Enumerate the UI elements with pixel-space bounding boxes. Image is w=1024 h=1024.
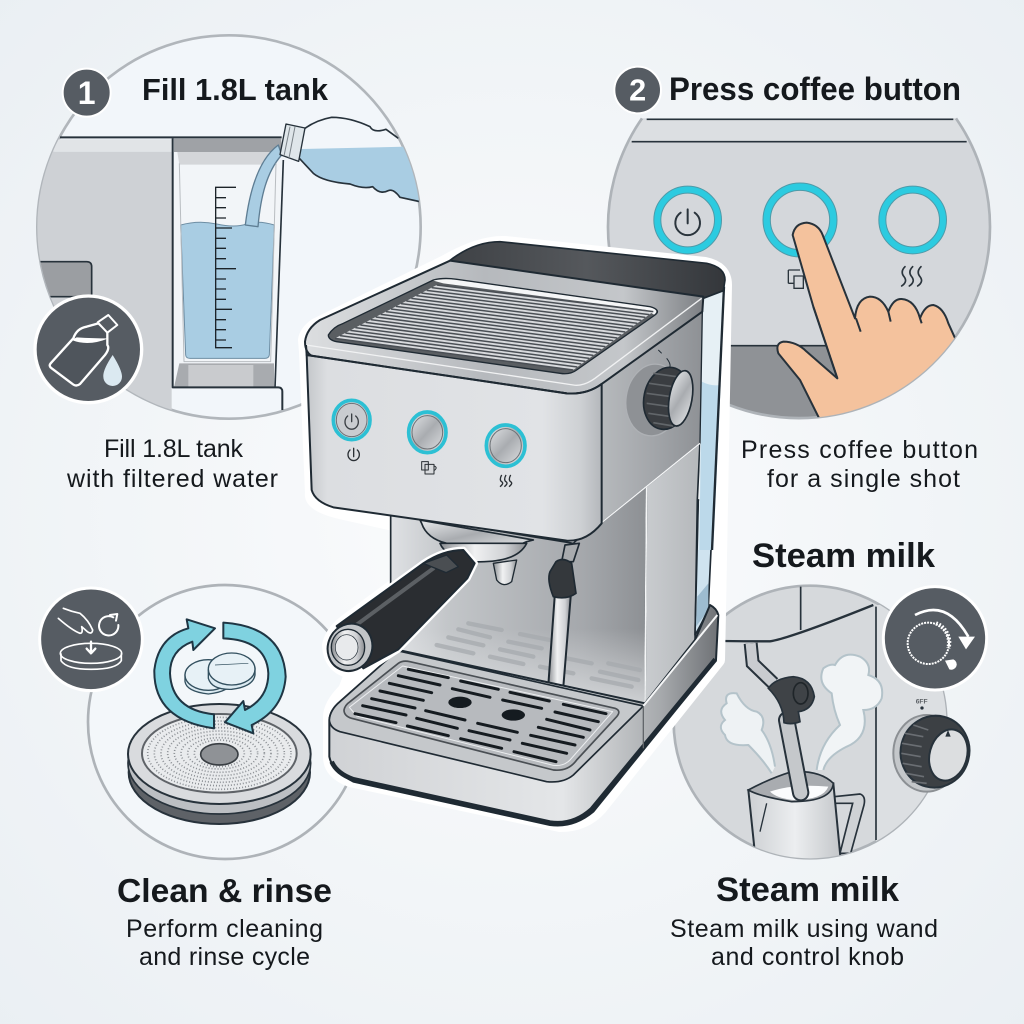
dark lid [448, 242, 725, 298]
caption: press button: Press coffee button [741, 436, 978, 464]
group head [420, 520, 533, 585]
drip tray base [329, 605, 718, 826]
right steam [817, 655, 882, 770]
panel: step 2 press button [600, 118, 1000, 437]
espresso machine: lower body [320, 442, 718, 826]
tray reflection [437, 623, 640, 687]
cleaning disc [128, 704, 311, 824]
steam button [486, 425, 525, 487]
pitcher [834, 794, 864, 853]
coffee button [409, 412, 446, 474]
power button [657, 190, 718, 250]
wand [787, 720, 801, 793]
pouring stream [245, 145, 282, 227]
heading: fill tank: Fill 1.8L tank [142, 72, 329, 107]
caption: steam milk [670, 915, 938, 971]
icon: cycle arrows [154, 619, 286, 733]
tank scene [30, 117, 425, 432]
caption: steam milk: Steam milk using wand [670, 915, 938, 943]
machine white outline [305, 243, 725, 825]
caption: press button: for a single shot [767, 465, 960, 493]
right side panel [602, 312, 702, 523]
panel: step 4 steam milk [660, 586, 987, 870]
heading: steam milk: Steam milk [716, 871, 900, 909]
steam wand [548, 543, 579, 689]
steam wand tube [751, 643, 773, 683]
control knob [893, 698, 977, 795]
right column [645, 442, 713, 703]
caption: press button [741, 436, 978, 493]
control knob: 6FF [916, 698, 928, 705]
bottle water [299, 147, 425, 203]
steam scene [720, 586, 946, 858]
step badge 2 [614, 67, 661, 113]
caption: fill tank: Fill 1.8L tank [104, 435, 244, 463]
icon: rotate knob [883, 587, 987, 690]
heading: steam milk top: Steam milk [752, 537, 936, 575]
measuring scale [216, 187, 236, 348]
panel: step 3 clean and rinse [40, 585, 362, 859]
step badge 2: 2 [629, 74, 646, 108]
heading: press button: Press coffee button [669, 71, 961, 107]
bottle outline [305, 117, 398, 138]
icon: clean cycle [40, 588, 142, 691]
caption: fill tank [66, 435, 278, 493]
left steam [721, 693, 775, 773]
back wall [391, 473, 647, 707]
steam button [882, 190, 943, 286]
coffee button [767, 187, 833, 288]
espresso machine: upper body [305, 242, 725, 550]
panel: step 1 fill tank [30, 35, 425, 432]
machine top [305, 261, 703, 394]
drip grid [344, 661, 619, 770]
power button [333, 400, 370, 461]
heading: clean and rinse: Clean & rinse [117, 873, 332, 910]
water in tank [181, 222, 274, 358]
icon: bottle and drop [35, 296, 142, 403]
caption: clean and rinse: and rinse cycle [139, 943, 310, 971]
caption: fill tank: with filtered water [66, 465, 278, 493]
cleaning tablets [185, 653, 255, 694]
side knob [621, 350, 697, 439]
icon: pressing hand [777, 223, 957, 423]
caption: clean and rinse: Perform cleaning [126, 915, 323, 943]
caption: steam milk: and control knob [711, 943, 904, 971]
portafilter handle [320, 550, 475, 678]
panel outline [608, 118, 990, 418]
water tank [698, 287, 724, 550]
caption: clean and rinse [126, 915, 323, 971]
front panel [306, 345, 602, 541]
step badge 1 [63, 69, 111, 117]
control panel scene [632, 118, 967, 417]
top grille [335, 285, 653, 370]
step badge 1: 1 [78, 75, 96, 111]
